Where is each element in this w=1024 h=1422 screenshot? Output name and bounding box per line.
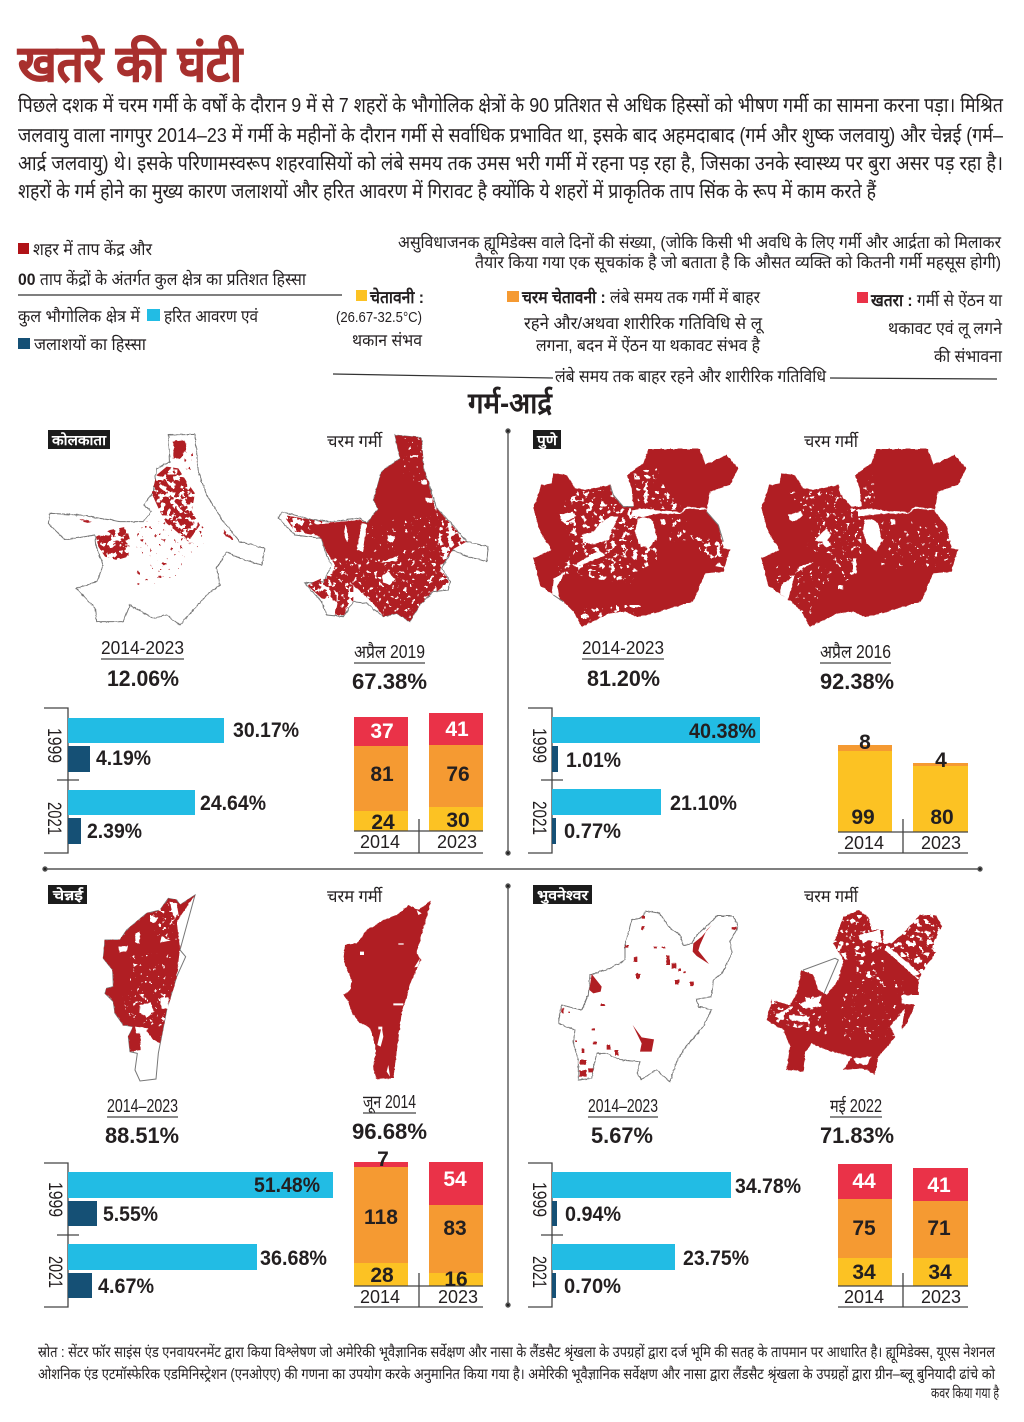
legend: heat zones and land share: 00 ताप केंद्रों के अंतर्गत कुल क्षेत्र का प्रतिशत हिस्सा [18, 269, 307, 290]
bar chart: green cover and water bodies: 34.78% [735, 1175, 801, 1198]
caption: 2014-2023: 12.06% [107, 666, 179, 691]
stacked bars: humidex days [354, 713, 483, 853]
bar chart: green cover and water bodies: 23.75% [683, 1247, 749, 1270]
bar chart: green cover and water bodies: 36.68% [260, 1247, 327, 1270]
stacked bars: humidex days: 118 [364, 1206, 398, 1229]
bar chart: green cover and water bodies: 51.48% [254, 1174, 320, 1197]
panel: Chennai [44, 885, 483, 1307]
bar chart: green cover and water bodies: 2021 [44, 1256, 65, 1288]
stacked bars: humidex days: 28 [370, 1264, 394, 1287]
stacked bars: humidex days: 83 [443, 1217, 467, 1240]
legend: danger: की संभावना [934, 346, 1003, 366]
legend: heat zones and land share: शहर में ताप केंद्र और [33, 239, 153, 259]
city label: भुवनेश्वर [537, 887, 589, 905]
bar chart: green cover and water bodies: 1999 [528, 728, 549, 763]
stacked bars: humidex days: 34 [852, 1261, 876, 1284]
stacked bars: humidex days: 2023 [921, 833, 961, 853]
panel: Kolkata [43, 430, 488, 853]
caption: 2014-2023: 81.20% [587, 666, 660, 691]
stacked bars: humidex days: 99 [851, 806, 875, 829]
legend: caution: चेतावनी : [369, 287, 424, 307]
source note: कवर किया गया है [931, 1384, 1000, 1402]
bar chart: green cover and water bodies: 2021 [528, 1256, 549, 1288]
city label [48, 430, 110, 449]
bar chart: green cover and water bodies: 2.39% [87, 820, 142, 843]
stacked bars: humidex days: 2014 [844, 833, 884, 853]
map: Pune 2014-2023 [533, 449, 738, 627]
stacked bars: humidex days [838, 1164, 968, 1307]
legend: danger [857, 290, 1003, 366]
stacked bars: humidex days: 2023 [437, 832, 477, 852]
caption: April 2016: 92.38% [820, 669, 894, 694]
bar chart: green cover and water bodies: 1999 [43, 728, 64, 763]
caption: April 2019: 67.38% [352, 669, 427, 694]
panel: Bhubaneswar [528, 885, 968, 1307]
city label [533, 885, 592, 905]
stacked bars: humidex days: 81 [370, 763, 394, 786]
panel: Pune [528, 430, 968, 853]
map: Kolkata April 2019 [278, 435, 488, 622]
legend: extreme caution: लगना, बदन में ऐंठन या थकावट संभव है [536, 335, 761, 355]
bar chart: green cover and water bodies: 40.38% [689, 720, 756, 743]
bar chart: green cover and water bodies: 2021 [43, 802, 64, 835]
section heading: गर्म-आर्द्र [467, 386, 554, 420]
bar chart: green cover and water bodies [528, 708, 760, 853]
legend: heat zones and land share: हरित आवरण एवं [164, 306, 258, 326]
caption: June 2014: जून 2014 [363, 1092, 416, 1113]
stacked bars: humidex days [354, 1148, 483, 1307]
legend: heat zones and land share: जलाशयों का हिस्सा [34, 334, 147, 354]
caption: May 2022 [820, 1095, 894, 1148]
legend: danger: थकावट एवं लू लगने [888, 318, 1003, 339]
caption: 2014-2023 [105, 1096, 179, 1148]
bar chart: green cover and water bodies: 2021 [528, 801, 549, 835]
stacked bars: humidex days: 41 [927, 1174, 951, 1197]
bar chart: green cover and water bodies: 1999 [44, 1182, 65, 1217]
extreme heat label: चरम गर्मी [327, 886, 384, 906]
bar chart: green cover and water bodies: 21.10% [670, 792, 737, 815]
legend: danger: खतरा : गर्मी से ऐंठन या [870, 290, 1003, 310]
bar chart: green cover and water bodies: 24.64% [200, 792, 266, 815]
legend: heat zones and land share [18, 239, 342, 354]
bar chart: green cover and water bodies: 1999 [528, 1182, 549, 1217]
stacked bars: humidex days: 76 [446, 763, 470, 786]
city label [48, 885, 87, 904]
stacked bars: humidex days: 8 [859, 731, 871, 754]
intro paragraph: शहरों के गर्म होने का मुख्य कारण जलाशयों और हरित आवरण में गिरावट है क्योंकि ये शहरों में प्राकृतिक ताप सिंक के रूप में काम करते हैं [18, 179, 877, 204]
caption: April 2016 [820, 641, 894, 694]
extreme heat label: चरम गर्मी [804, 431, 860, 451]
extreme heat label: चरम गर्मी [804, 886, 860, 906]
bar chart: green cover and water bodies: 4.67% [98, 1275, 154, 1298]
stacked bars: humidex days: 75 [852, 1217, 876, 1240]
city label: चेन्नई [52, 887, 84, 903]
bar chart: green cover and water bodies: 5.55% [103, 1203, 158, 1226]
stacked bars: humidex days: 80 [930, 806, 954, 829]
humidex description [398, 232, 1002, 273]
caption: 2014-2023 [582, 638, 664, 691]
stacked bars: humidex days: 2023 [438, 1287, 478, 1307]
caption: 2014-2023: 88.51% [105, 1123, 179, 1148]
legend: extreme caution [507, 287, 765, 355]
caption: May 2022: मई 2022 [830, 1095, 882, 1116]
caption: June 2014: 96.68% [352, 1119, 427, 1144]
stacked bars: humidex days: 7 [377, 1148, 389, 1171]
stacked bars: humidex days: 2023 [921, 1287, 961, 1307]
stacked bars: humidex days: 2014 [360, 832, 400, 852]
stacked bars: humidex days: 16 [444, 1268, 468, 1291]
caption: May 2022: 71.83% [820, 1123, 894, 1148]
bar chart: green cover and water bodies [43, 708, 299, 853]
bar chart: green cover and water bodies: 0.94% [565, 1203, 621, 1226]
stacked bars: humidex days: 44 [852, 1170, 876, 1193]
map: Kolkata 2014-2023 [48, 434, 265, 625]
map: Bhubaneswar 2014-2023 [558, 911, 738, 1082]
stacked bars: humidex days: 41 [445, 718, 469, 741]
caption: April 2016: अप्रैल 2016 [820, 641, 891, 662]
map: Chennai 2014-2023 [103, 895, 195, 1081]
caption: 2014-2023: 2014–2023 [107, 1096, 178, 1116]
intro paragraph [18, 93, 1004, 204]
map: Chennai June 2014 [343, 901, 431, 1079]
caption: 2014-2023: 2014–2023 [588, 1096, 658, 1116]
stacked bars: humidex days: 2014 [844, 1287, 884, 1307]
stacked bars: humidex days: 2014 [360, 1287, 400, 1307]
stacked bars: humidex days [838, 731, 968, 853]
caption: 2014-2023 [588, 1096, 658, 1148]
dividers [43, 429, 982, 1307]
legend: caution [336, 287, 424, 350]
bar chart: green cover and water bodies: 1.01% [566, 749, 621, 772]
stacked bars: humidex days: 54 [443, 1168, 467, 1191]
title: खतरे की घंटी [17, 35, 244, 92]
legend: caution: (26.67-32.5°C) [336, 309, 422, 326]
bar chart: green cover and water bodies: 0.70% [564, 1275, 621, 1298]
bar chart: green cover and water bodies [44, 1163, 333, 1307]
caption: 2014-2023: 2014-2023 [101, 638, 184, 658]
legend: extreme caution: रहने और/अथवा शारीरिक गतिविधि से लू [524, 313, 765, 334]
bar chart: green cover and water bodies: 4.19% [96, 747, 151, 770]
caption: 2014-2023 [101, 638, 184, 691]
legend: extreme caution: चरम चेतावनी : लंबे समय तक गर्मी में बाहर [521, 287, 761, 307]
stacked bars: humidex days: 4 [935, 749, 947, 772]
activity axis label [333, 366, 997, 386]
activity axis label: लंबे समय तक बाहर रहने और शारीरिक गतिविधि [555, 366, 827, 386]
city label: कोलकाता [51, 432, 107, 448]
stacked bars: humidex days: 71 [927, 1217, 951, 1240]
extreme heat label: चरम गर्मी [327, 431, 384, 451]
legend: caution: थकान संभव [352, 331, 423, 350]
bar chart: green cover and water bodies: 0.77% [564, 820, 621, 843]
stacked bars: humidex days: 34 [928, 1261, 952, 1284]
city label [533, 430, 561, 450]
map: Bhubaneswar May 2022 [767, 910, 942, 1075]
humidex description: तैयार किया गया एक सूचकांक है जो बताता है कि औसत व्यक्ति को कितनी गर्मी महसूस होगी) [475, 252, 1001, 273]
city label: पुणे [536, 432, 558, 450]
caption: June 2014 [352, 1092, 427, 1144]
caption: April 2019: अप्रैल 2019 [354, 641, 425, 662]
stacked bars: humidex days: 24 [371, 811, 395, 834]
stacked bars: humidex days: 30 [446, 809, 470, 832]
map: Pune April 2016 [761, 449, 966, 627]
caption: 2014-2023: 2014-2023 [582, 638, 664, 658]
caption: April 2019 [352, 641, 427, 694]
bar chart: green cover and water bodies: 30.17% [233, 719, 299, 742]
caption: 2014-2023: 5.67% [591, 1123, 653, 1148]
source note [38, 1343, 1000, 1402]
stacked bars: humidex days: 37 [370, 720, 394, 743]
bar chart: green cover and water bodies [528, 1163, 801, 1307]
legend: heat zones and land share: कुल भौगोलिक क्षेत्र में [18, 306, 141, 327]
